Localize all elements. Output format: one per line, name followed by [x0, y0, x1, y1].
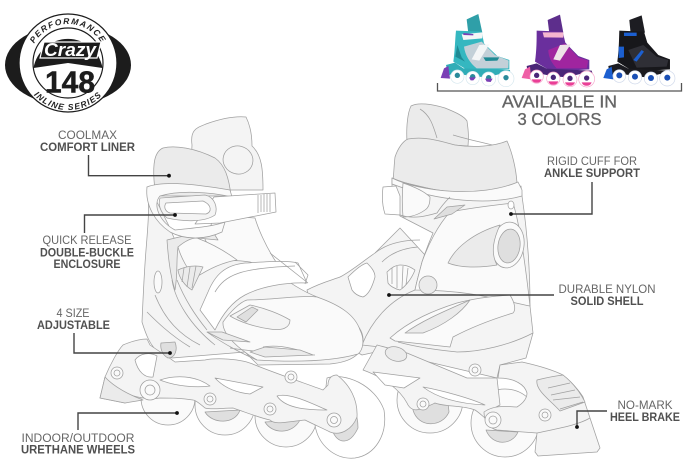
logo: Crazy 148 Performance Inline Series [5, 13, 131, 113]
callout: durable nylon solid shell [387, 284, 656, 308]
oval tab [220, 143, 256, 177]
colour options: black skate [603, 15, 675, 86]
logo inner badge [33, 28, 103, 98]
callout: rigid cuff for ankle support: RIGID CUFF FOR [547, 156, 637, 168]
callout: coolmax comfort liner [40, 130, 171, 178]
logo arc text: inline series: INLINE SERIES [34, 92, 100, 110]
rear frame knobs [417, 364, 481, 410]
back tongue [190, 117, 263, 190]
cuff triangle vent [402, 183, 430, 217]
skate illustration: front skate [100, 117, 385, 458]
callout: indoor/outdoor urethane wheels [21, 411, 179, 456]
callout: coolmax comfort liner: COOLMAX [58, 130, 117, 142]
front frame knobs [111, 367, 341, 427]
callout: rigid cuff for ankle support: ANKLE SUPPORT [544, 168, 640, 180]
logo side ears [5, 25, 131, 105]
logo arc text: performance: PERFORMANCE [30, 18, 106, 44]
padded liner [393, 138, 517, 198]
cuff band [392, 178, 522, 201]
callout: indoor/outdoor urethane wheels: INDOOR/OUTDOOR [22, 433, 134, 445]
heel brake [484, 362, 600, 456]
toe shell behind [307, 228, 425, 355]
rear brake plate [100, 377, 143, 403]
callout: coolmax comfort liner: COMFORT LINER [40, 142, 136, 154]
rear frame [363, 345, 500, 419]
colour options: teal skate [441, 14, 514, 87]
logo brand name: Crazy [44, 40, 97, 60]
back tongue [407, 104, 468, 146]
rear skate wheels [397, 367, 539, 457]
callout: no-mark heel brake [575, 400, 680, 429]
cuff collar [147, 184, 232, 238]
colour options: purple skate [522, 15, 595, 87]
callout: durable nylon solid shell: DURABLE NYLON [558, 284, 656, 296]
rigid cuff shell [362, 178, 533, 378]
callout: quick release double-buckle enclosure [40, 213, 177, 271]
front frame [100, 339, 357, 433]
callout: 4 size adjustable: ADJUSTABLE [37, 320, 110, 332]
logo brand plate [40, 42, 101, 58]
skate illustration: rear skate [307, 104, 600, 457]
logo ring [19, 14, 117, 112]
heading: available in 3 colors: AVAILABLE IN [502, 92, 617, 112]
callout: quick release double-buckle enclosure: QUICK RELEASE [42, 235, 132, 247]
heel brake knobs [485, 409, 551, 428]
callout: rigid cuff for ankle support [509, 156, 640, 216]
adjuster tab [161, 342, 176, 358]
buckle clip [348, 263, 375, 297]
callout: quick release double-buckle enclosure: DOUBLE-BUCKLE [40, 248, 134, 260]
front skate wheels [141, 371, 385, 458]
callout: no-mark heel brake: NO-MARK [618, 400, 673, 412]
buckle housing [382, 186, 400, 215]
callout: 4 size adjustable: 4 SIZE [56, 308, 90, 320]
heading: available in 3 colors [502, 92, 617, 129]
callout: 4 size adjustable [37, 308, 172, 355]
lower shell panel [415, 203, 530, 306]
callout: no-mark heel brake: HEEL BRAKE [610, 412, 680, 424]
main boot shell [142, 187, 363, 365]
instep strap [200, 261, 307, 330]
callout: quick release double-buckle enclosure: ENCLOSURE [54, 259, 121, 271]
logo model number: 148 [45, 64, 95, 100]
padded liner [154, 147, 231, 196]
lower ankle rear [205, 215, 276, 285]
frame openings [135, 354, 157, 377]
side vents [390, 295, 515, 347]
strap with ratchet [159, 193, 276, 224]
heading: available in 3 colors: 3 COLORS [518, 109, 602, 129]
inner ankle panel [167, 232, 218, 290]
heel vent [154, 271, 162, 293]
hinge disc [489, 220, 527, 270]
callout: indoor/outdoor urethane wheels: URETHANE WHEELS [21, 444, 135, 456]
callout: durable nylon solid shell: SOLID SHELL [570, 296, 644, 308]
colours bracket [438, 83, 682, 91]
toe cap [223, 297, 363, 361]
